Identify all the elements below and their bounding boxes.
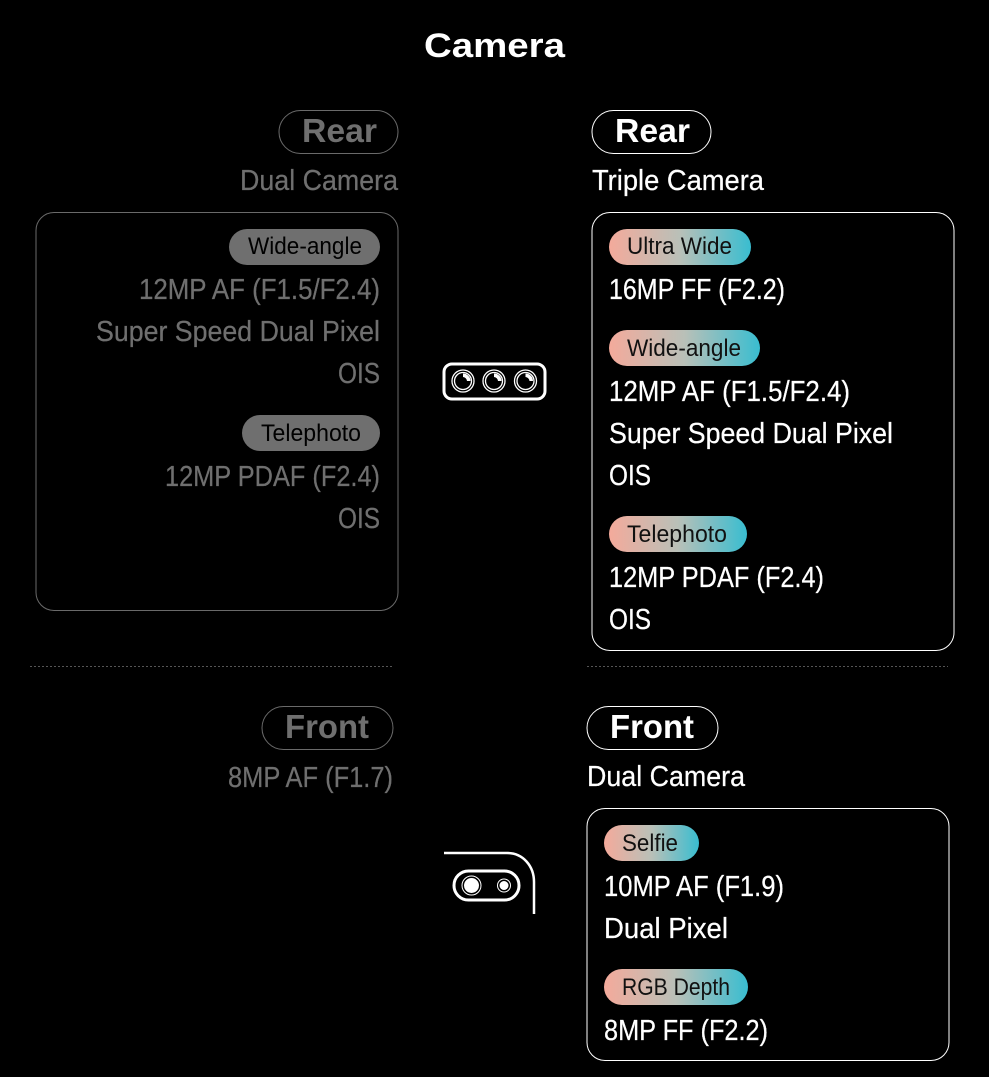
selfie specs: Dual Pixel xyxy=(604,913,728,945)
rear subtitle (previous): Dual Camera xyxy=(240,165,399,197)
wide-angle specs (previous) xyxy=(96,274,380,390)
selfie specs xyxy=(604,871,784,945)
chip: wide-angle: Wide-angle xyxy=(627,335,741,362)
front pill (new) xyxy=(587,706,718,750)
rear spec box (previous) xyxy=(36,212,398,610)
chip: selfie: Selfie xyxy=(622,830,678,857)
telephoto specs: 12MP PDAF (F2.4) xyxy=(609,562,824,594)
telephoto specs xyxy=(609,562,824,636)
wide-angle specs: OIS xyxy=(609,460,651,492)
wide-angle specs: 12MP AF (F1.5/F2.4) xyxy=(609,376,850,408)
rear pill (previous) xyxy=(279,110,398,154)
wide-angle specs xyxy=(609,376,893,492)
front pill (previous): Front xyxy=(285,708,369,745)
front pill (previous) xyxy=(262,706,393,750)
front subtitle (new): Dual Camera xyxy=(587,761,746,793)
wide-angle specs (previous): OIS xyxy=(338,358,380,390)
chip: rgb depth xyxy=(604,969,748,1005)
rgb depth specs: 8MP FF (F2.2) xyxy=(604,1015,768,1047)
panel: previous rear camera xyxy=(36,110,399,610)
telephoto specs (previous): OIS xyxy=(338,503,380,535)
rear pill (previous): Rear xyxy=(302,112,377,149)
rear subtitle (new): Triple Camera xyxy=(592,165,765,197)
ultra wide specs: 16MP FF (F2.2) xyxy=(609,274,785,306)
chip: wide-angle (previous): Wide-angle xyxy=(248,233,362,260)
front spec box (new) xyxy=(587,808,949,1060)
chip: telephoto (previous): Telephoto xyxy=(261,420,361,447)
title: Camera xyxy=(424,27,566,65)
chip: telephoto: Telephoto xyxy=(627,521,727,548)
telephoto specs (previous) xyxy=(165,461,380,535)
rear pill (new) xyxy=(592,110,711,154)
wide-angle specs (previous): 12MP AF (F1.5/F2.4) xyxy=(139,274,380,306)
icon: triple rear camera xyxy=(444,364,545,399)
front spec (previous): 8MP AF (F1.7) xyxy=(228,762,393,794)
panel: new rear camera xyxy=(592,110,954,650)
front pill (new): Front xyxy=(610,708,694,745)
chip: ultra wide xyxy=(609,229,751,265)
telephoto specs (previous): 12MP PDAF (F2.4) xyxy=(165,461,380,493)
chip: wide-angle (previous) xyxy=(229,229,380,265)
chip: wide-angle xyxy=(609,330,760,366)
rear pill (new): Rear xyxy=(615,112,690,149)
icon: dual front camera xyxy=(444,853,534,914)
wide-angle specs (previous): Super Speed Dual Pixel xyxy=(96,316,380,348)
chip: telephoto (previous) xyxy=(242,415,380,451)
rear spec box (new) xyxy=(592,212,954,650)
panel: new front camera xyxy=(587,706,949,1060)
chip: telephoto xyxy=(609,516,747,552)
selfie specs: 10MP AF (F1.9) xyxy=(604,871,784,903)
telephoto specs: OIS xyxy=(609,604,651,636)
chip: selfie xyxy=(604,825,699,861)
chip: rgb depth: RGB Depth xyxy=(622,974,730,1001)
panel: previous front camera xyxy=(228,706,393,794)
wide-angle specs: Super Speed Dual Pixel xyxy=(609,418,893,450)
chip: ultra wide: Ultra Wide xyxy=(627,233,732,260)
